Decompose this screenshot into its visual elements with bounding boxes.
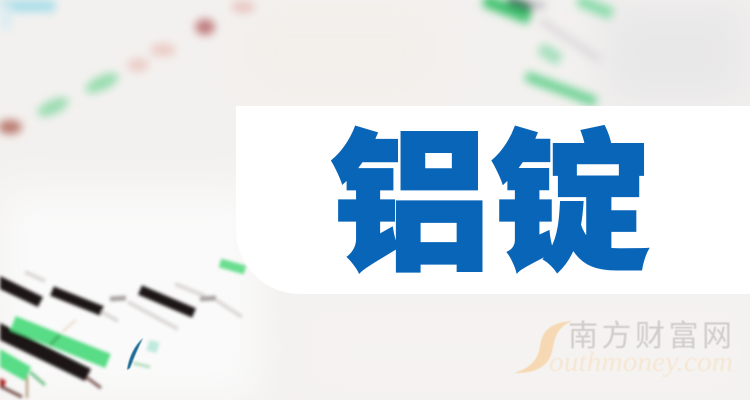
watermark: southmoney logo xyxy=(514,311,733,378)
blue sliver xyxy=(127,338,143,370)
black candles xyxy=(0,276,43,307)
logo swoosh S xyxy=(514,321,572,373)
title: 铝锭: 铝锭 xyxy=(331,81,651,301)
logo chinese name: 南方财富网 xyxy=(568,311,732,355)
blurred candlesticks: top right xyxy=(484,0,612,102)
blurred candlesticks: top left xyxy=(0,0,255,134)
wicks xyxy=(25,272,242,329)
green candles xyxy=(13,323,108,361)
candlestick chart: bottom left xyxy=(0,263,245,398)
logo latin name: outhmoney.com xyxy=(549,346,733,378)
